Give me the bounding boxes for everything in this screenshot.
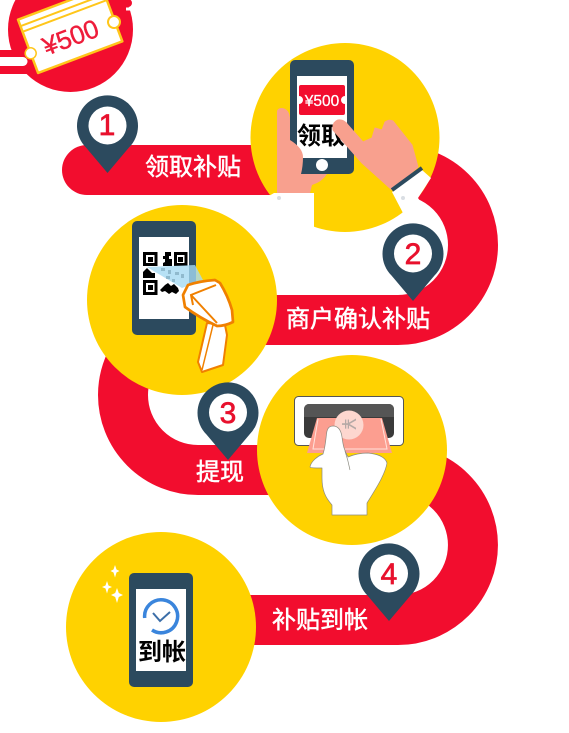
step 3 illustration: card slot withdrawal (257, 355, 447, 545)
step 3 label: 提现 (196, 459, 244, 486)
step 4 illustration: payment received phone (66, 532, 256, 722)
winding red path (87, 170, 473, 620)
step 1 label: 领取补贴 (145, 154, 241, 181)
left cuff (262, 193, 314, 229)
header badge: ticket (0, 0, 140, 92)
phone claim label: 领取 (297, 123, 345, 150)
phone received label: 到帐 (138, 639, 186, 666)
step 3 illustration: card slot withdrawal: ¥ (337, 417, 359, 430)
hand (310, 426, 387, 515)
pin 4: 4 (381, 558, 397, 591)
pin 2 (382, 223, 444, 301)
pin 4 (358, 543, 419, 621)
scanner handle (198, 323, 227, 372)
QR code (144, 254, 186, 294)
step 4 label: 补贴到帐 (272, 607, 368, 634)
sparkles (102, 565, 123, 603)
pin 3 (198, 382, 258, 460)
step 2 label: 商户确认补贴 (286, 306, 430, 333)
scanner head (183, 280, 233, 326)
scan beam (147, 265, 203, 288)
pin 2: 2 (405, 238, 421, 271)
pin 1 (77, 95, 138, 173)
check icon (145, 600, 178, 633)
phone ticket label: ¥500 (304, 93, 340, 110)
ticket amount: ¥500 (37, 13, 103, 62)
banknote (307, 418, 392, 453)
pin 3: 3 (220, 397, 236, 430)
right sleeve (392, 170, 431, 215)
pin 1: 1 (99, 109, 115, 142)
step 1 illustration: phone and claiming hand (250, 43, 440, 232)
left hand (277, 108, 327, 193)
step 2 illustration: QR code scanner (87, 205, 277, 395)
right hand (333, 120, 418, 190)
